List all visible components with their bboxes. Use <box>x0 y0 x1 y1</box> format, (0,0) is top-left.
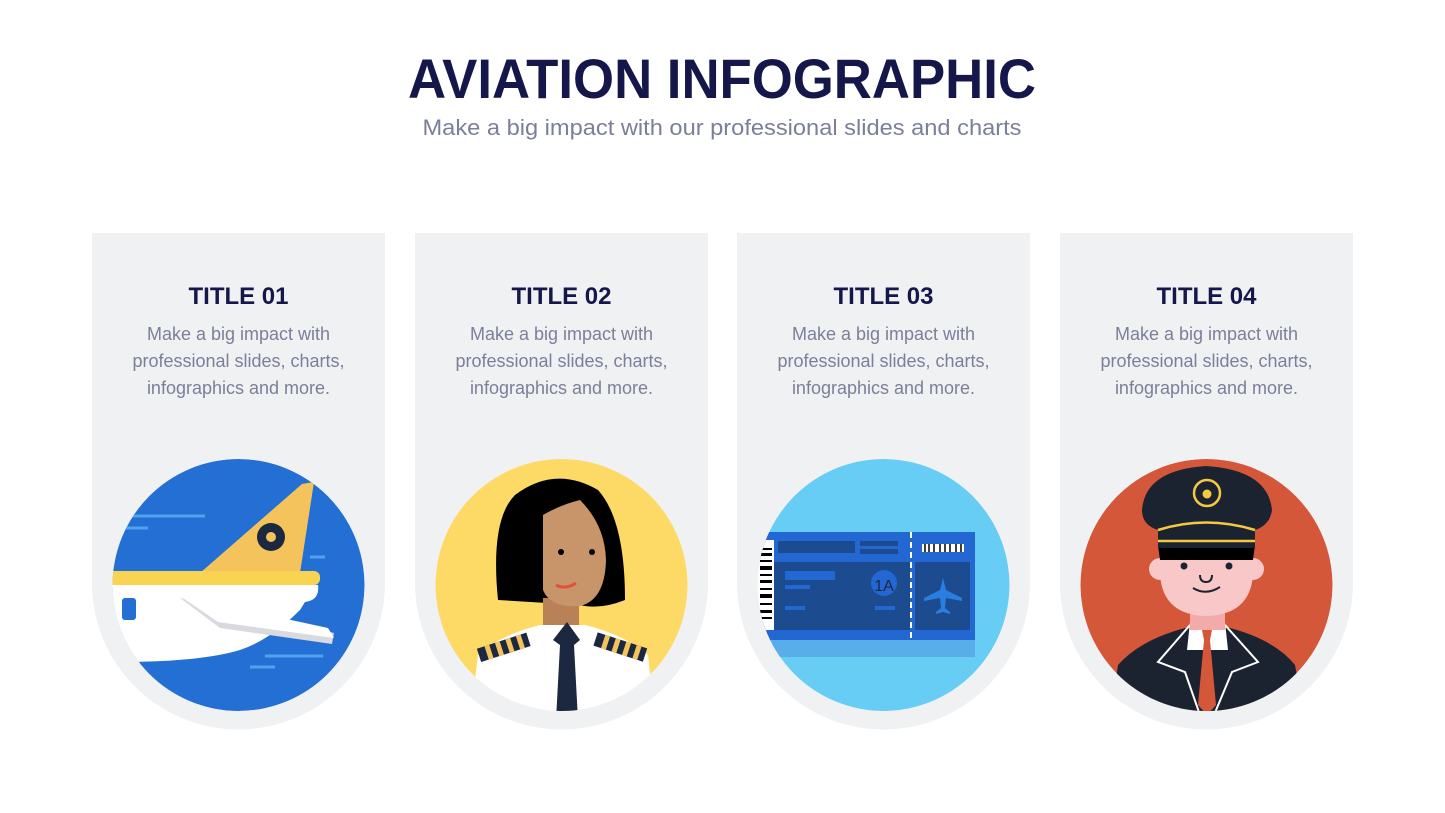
heading 02: TITLE 02 <box>511 283 612 310</box>
text block 03: infographics and more. <box>792 378 975 398</box>
text block 01: Make a big impact with <box>147 324 330 344</box>
text block 02: professional slides, charts, <box>455 351 668 371</box>
text block 04: infographics and more. <box>1115 378 1298 398</box>
text block 03: Make a big impact with <box>792 324 975 344</box>
text block 02: infographics and more. <box>470 378 653 398</box>
panel: title 04 <box>1060 233 1353 729</box>
icon: boarding pass <box>756 459 1010 711</box>
subtitle: Make a big impact with our professional slides and charts <box>422 115 1022 140</box>
icon: airplane <box>100 459 364 711</box>
icon: boarding pass: 1A <box>874 578 894 595</box>
icon: male pilot <box>1080 459 1332 720</box>
text block 01: infographics and more. <box>147 378 330 398</box>
text block 03: professional slides, charts, <box>777 351 990 371</box>
panel: title 02 <box>415 233 708 729</box>
panel: title 03 <box>737 233 1030 729</box>
text block 04: Make a big impact with <box>1115 324 1298 344</box>
heading 03: TITLE 03 <box>833 283 934 310</box>
heading 01: TITLE 01 <box>188 283 289 310</box>
title: AVIATION INFOGRAPHIC <box>408 47 1036 110</box>
text block 04: professional slides, charts, <box>1100 351 1313 371</box>
icon: female pilot <box>436 459 688 720</box>
text block 02: Make a big impact with <box>470 324 653 344</box>
heading 04: TITLE 04 <box>1156 283 1257 310</box>
panel: title 01 <box>92 233 385 729</box>
text block 01: professional slides, charts, <box>132 351 345 371</box>
